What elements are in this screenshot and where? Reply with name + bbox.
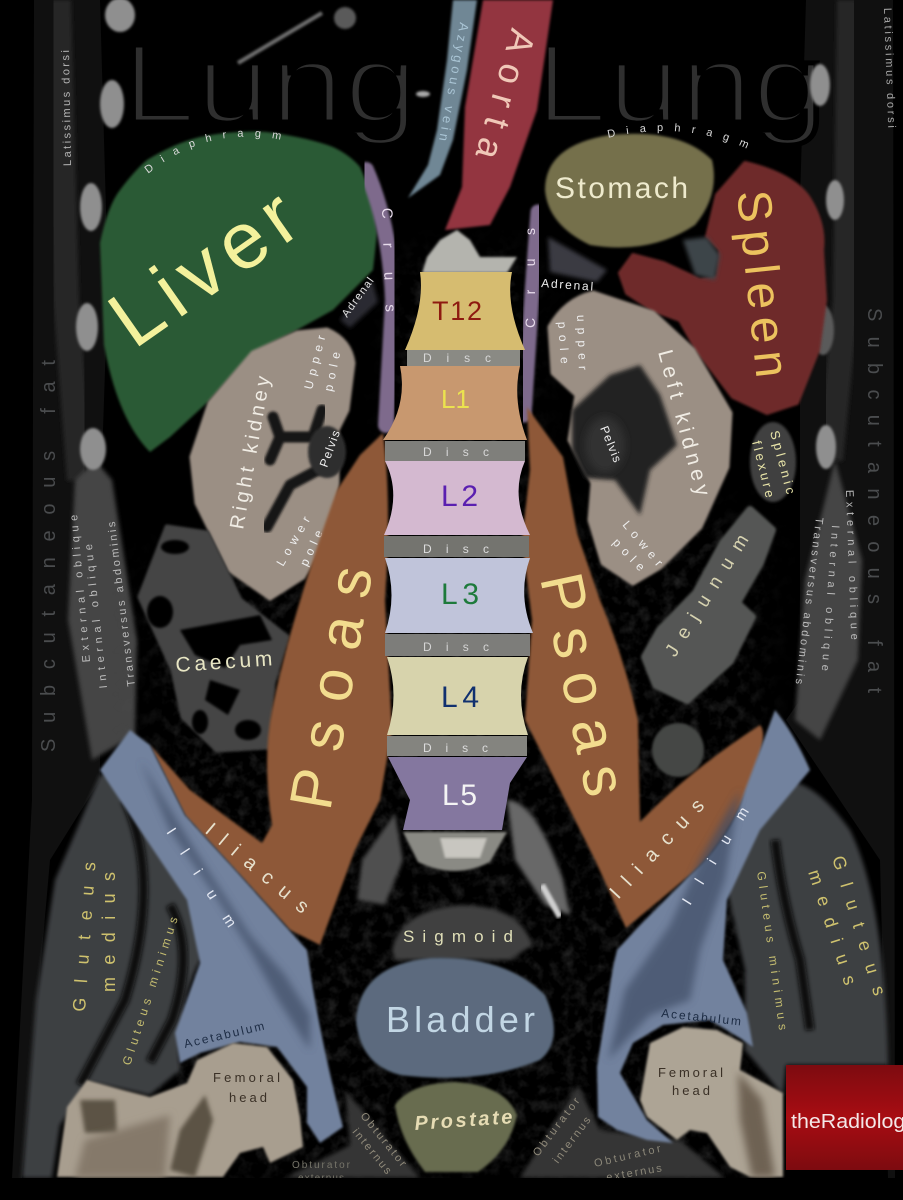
label: diaphragm right: Diaphragm bbox=[608, 123, 748, 148]
organ: prostate bbox=[395, 1082, 517, 1172]
label: subcutaneous fat left: Subcutaneous fat bbox=[38, 360, 60, 752]
label: obturator internus left: Obturator bbox=[358, 1110, 409, 1169]
vertebra: L2: L2 bbox=[441, 480, 478, 513]
ribs bbox=[76, 0, 844, 470]
organ: stomach bbox=[545, 134, 714, 248]
label: gluteus medius left second line: medius bbox=[99, 872, 119, 992]
label: gluteus minimus left: Gluteus minimus bbox=[120, 915, 181, 1067]
vertebra: L1 bbox=[383, 366, 527, 440]
label: obturator internus right second line: internus bbox=[551, 1114, 594, 1166]
label: right kidney: Right kidney bbox=[226, 374, 275, 531]
disc L1-L2 bbox=[385, 441, 525, 461]
organ: crus left bbox=[366, 170, 399, 425]
label: lower pole left second line: pole bbox=[610, 535, 648, 574]
organ: splenic gap tissue bbox=[683, 237, 720, 280]
organ: bladder bbox=[356, 958, 554, 1078]
label: external oblique right: External oblique bbox=[843, 490, 860, 640]
organ: jejunum bbox=[645, 510, 772, 700]
organ: left adrenal bbox=[541, 237, 607, 294]
vertebra: L3: L3 bbox=[441, 578, 479, 611]
label: diaphragm left: Diaphragm bbox=[144, 130, 281, 174]
kidney pelvis bbox=[267, 410, 322, 527]
label: lower pole right second line: pole bbox=[297, 528, 326, 568]
label: upper pole left second line: pole bbox=[555, 321, 572, 364]
vertebra: L5: L5 bbox=[442, 779, 477, 812]
spine: lumbar vertebrae bbox=[383, 230, 533, 871]
kidney pelvis bbox=[572, 365, 677, 515]
label: left adrenal: Adrenal bbox=[541, 276, 594, 294]
gluteal muscles left bbox=[22, 775, 201, 1178]
organ: aorta bbox=[445, 0, 553, 230]
bone: right femoral head bbox=[640, 1027, 783, 1177]
vertebra: T12: T12 bbox=[432, 296, 482, 326]
label: external oblique left: External oblique bbox=[68, 514, 93, 663]
label: right adrenal: Adrenal bbox=[340, 275, 376, 320]
labels: muscles of the wall right bbox=[531, 8, 897, 1184]
organ: right psoas and iliacus bbox=[522, 407, 763, 928]
organ: spleen bbox=[620, 163, 825, 413]
label: jejunum: Jejunum bbox=[661, 531, 753, 661]
label: spleen: Spleen bbox=[726, 188, 798, 380]
label: gluteus medius left: Gluteus bbox=[69, 861, 99, 1012]
label: obturator internus right: Obturator bbox=[531, 1095, 583, 1159]
label: liver: Liver bbox=[93, 172, 314, 364]
logo: theRadiology bbox=[786, 1065, 903, 1170]
label: internal oblique left: Internal oblique bbox=[83, 543, 110, 689]
label: latissimus dorsi right: Latissimus dorsi bbox=[881, 8, 897, 128]
vertebra: L1: L1 bbox=[441, 384, 470, 414]
label: splenic flexure second line: flexure bbox=[749, 439, 778, 499]
vertebra: T12 bbox=[405, 272, 525, 350]
label: left lung: Lung bbox=[122, 21, 418, 146]
label: bladder: Bladder bbox=[386, 999, 535, 1040]
label: prostate: Prostate bbox=[414, 1106, 513, 1135]
label: femoral head right second line: head bbox=[672, 1083, 710, 1098]
label: right lung: Lung bbox=[535, 21, 825, 146]
label: upper pole right second line: pole bbox=[321, 350, 343, 393]
label: caecum: Caecum bbox=[175, 647, 273, 677]
central fat mottling bbox=[144, 264, 760, 1178]
obturator muscles bbox=[285, 1090, 420, 1178]
label: gluteus medius right second line: medius bbox=[804, 867, 860, 987]
disc L2-L3: Disc bbox=[423, 542, 489, 556]
organ: right adrenal bbox=[340, 275, 378, 328]
organ: crus right bbox=[522, 212, 538, 415]
label: azygous vein: Azygous vein bbox=[436, 21, 472, 142]
organ: splenic flexure bbox=[749, 422, 799, 502]
label: lower pole right: Lower bbox=[273, 514, 313, 568]
disc L3-L4: Disc bbox=[423, 640, 489, 654]
label: splenic flexure: Splenic bbox=[767, 429, 799, 496]
organ: colon left of sacrum bbox=[357, 813, 403, 905]
bone: left ilium bbox=[100, 730, 343, 1143]
lung labels bbox=[136, 48, 820, 146]
label: acetabulum left: Acetabulum bbox=[183, 1019, 266, 1051]
label: gluteus medius right: Gluteus bbox=[828, 853, 890, 998]
label: gluteus minimus right: Gluteus minimus bbox=[754, 870, 790, 1031]
disc L3-L4 bbox=[385, 634, 530, 656]
disc L2-L3 bbox=[384, 536, 529, 557]
label: lower pole left: Lower bbox=[620, 518, 666, 569]
label: crus left: Crus bbox=[378, 208, 399, 312]
label: femoral head left: Femoral bbox=[213, 1070, 280, 1085]
sacrum bbox=[403, 832, 507, 871]
label: internal oblique right: Internal oblique bbox=[819, 525, 841, 671]
vertebra: L4: L4 bbox=[441, 681, 479, 714]
labels: muscles of the wall left bbox=[38, 50, 409, 1184]
vertebra: L3 bbox=[385, 558, 533, 633]
disc T12-L1 bbox=[407, 350, 520, 366]
disc L4-L5: Disc bbox=[423, 741, 488, 755]
vertebra top cap bbox=[422, 230, 517, 273]
label: crus right: Crus bbox=[522, 228, 538, 328]
label: obturator externus right: Obturator bbox=[593, 1143, 662, 1170]
label: psoas left: Psoas bbox=[277, 561, 385, 814]
label: obturator externus left second line: externus bbox=[298, 1173, 344, 1184]
label: sigmoid: Sigmoid bbox=[403, 927, 513, 946]
label: femoral head right: Femoral bbox=[658, 1065, 723, 1080]
label: obturator externus right second line: externus bbox=[605, 1162, 663, 1184]
label: upper pole left: upper bbox=[574, 315, 590, 370]
label: transversus abdominis left: Transversus abdominis bbox=[106, 520, 138, 687]
label: transversus abdominis right: Transversus abdominis bbox=[792, 517, 825, 685]
label: femoral head left second line: head bbox=[229, 1090, 267, 1105]
label: left kidney: Left kidney bbox=[653, 347, 714, 499]
label: upper pole right: Upper bbox=[301, 334, 328, 391]
organ: bowel loop bbox=[652, 723, 704, 777]
label: stomach: Stomach bbox=[555, 172, 688, 205]
label: obturator externus left: Obturator bbox=[292, 1160, 351, 1171]
organ: liver bbox=[93, 132, 377, 452]
gluteal muscles right bbox=[725, 781, 888, 1095]
label: iliacus left: Iliacus bbox=[201, 819, 313, 918]
vertebra: L2 bbox=[384, 461, 530, 535]
label: acetabulum right: Acetabulum bbox=[661, 1006, 742, 1028]
label: aorta: Aorta bbox=[467, 25, 544, 165]
label: subcutaneous fat right: Subcutaneous fat bbox=[863, 308, 885, 693]
vertebra: L5 bbox=[388, 757, 527, 830]
bone: right ilium bbox=[597, 710, 810, 1143]
label: latissimus dorsi left: Latissimus dorsi bbox=[60, 50, 74, 166]
label: ilium left: Ilium bbox=[163, 825, 240, 931]
organ: right kidney bbox=[192, 330, 353, 598]
label: psoas right: Psoas bbox=[527, 567, 640, 802]
organ: sigmoid colon bbox=[357, 800, 570, 960]
disc L4-L5 bbox=[387, 736, 527, 756]
organ: azygous vein bbox=[408, 0, 477, 198]
organ: caecum bbox=[140, 527, 287, 750]
disc L1-L2: Disc bbox=[423, 445, 489, 459]
label: pelvis right: Pelvis bbox=[317, 429, 343, 469]
label: obturator internus left second line: internus bbox=[350, 1126, 394, 1177]
label: ilium right: Ilium bbox=[679, 804, 753, 908]
sacrum bright centre bbox=[440, 838, 487, 858]
organ: left kidney bbox=[550, 293, 730, 583]
organ: left psoas and iliacus bbox=[150, 433, 392, 945]
organ: colon right of sacrum bbox=[507, 800, 570, 915]
bone: left femoral head bbox=[57, 1043, 303, 1178]
disc T12-L1: Disc bbox=[423, 351, 491, 365]
label: iliacus right: Iliacus bbox=[606, 795, 709, 903]
vertebra: L4 bbox=[387, 657, 528, 735]
label: pelvis left: Pelvis bbox=[597, 424, 624, 464]
lung vessels bbox=[238, 7, 430, 97]
